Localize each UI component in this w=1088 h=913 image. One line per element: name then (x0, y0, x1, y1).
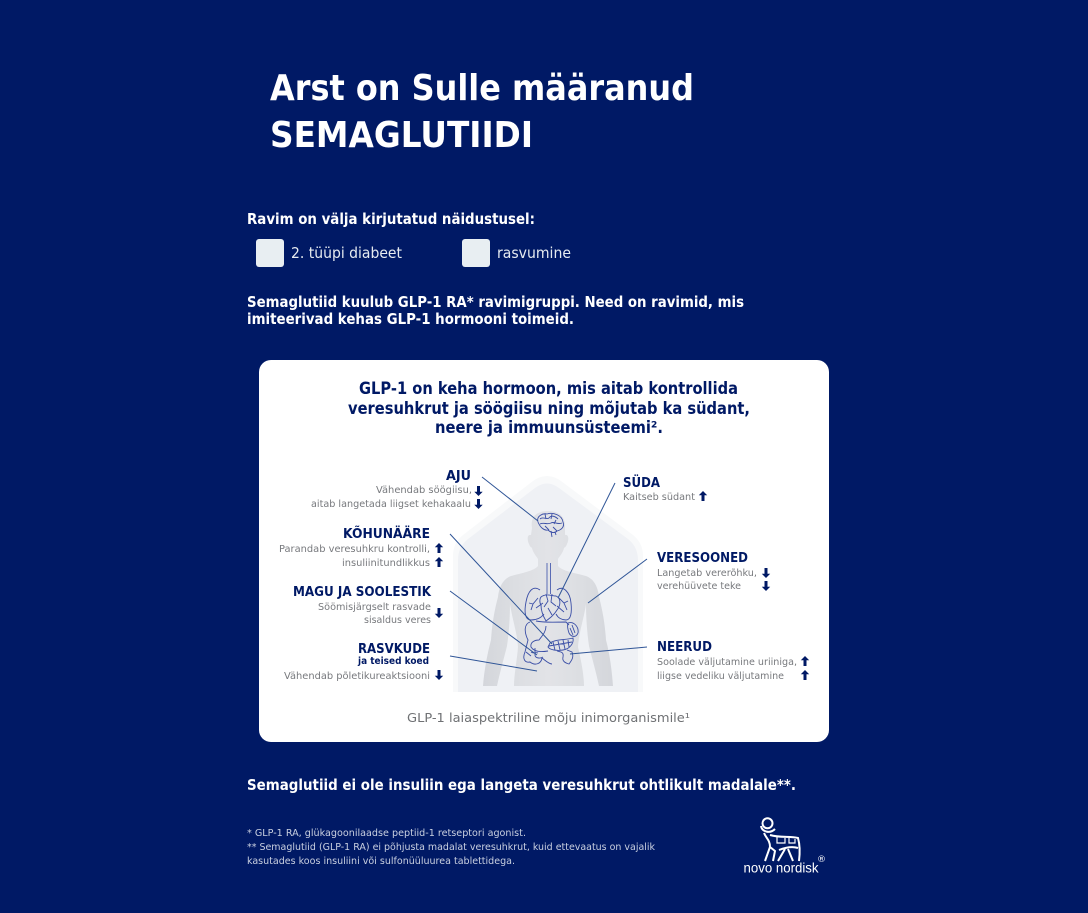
label: stomach and intestine: Söömisjärgselt rasvade (318, 602, 431, 613)
panel heading (348, 379, 750, 437)
panel caption: GLP-1 laiaspektriline mõju inimorganismile¹ (407, 710, 690, 725)
intro text (247, 293, 744, 328)
label: pancreas: Parandab veresuhkru kontrolli, (279, 544, 430, 555)
label: heart: SÜDA (623, 475, 660, 491)
title: SEMAGLUTIIDI (270, 115, 533, 156)
statement: Semaglutiid ei ole insuliin ega langeta veresuhkrut ohtlikult madalale**. (247, 776, 796, 794)
panel heading: GLP-1 on keha hormoon, mis aitab kontrollida (359, 379, 738, 398)
label: pancreas: insuliinitundlikkus (342, 558, 430, 569)
label: pancreas: KÕHUNÄÄRE (343, 526, 430, 542)
footnotes: kasutades koos insuliini või sulfonüüluurea tablettidega. (247, 856, 515, 867)
checkbox: type 2 diabetes (256, 239, 402, 267)
logo: novo nordisk (744, 818, 826, 876)
footnotes (247, 828, 655, 867)
label: kidneys: Soolade väljutamine uriiniga, (657, 657, 797, 668)
indication heading: Ravim on välja kirjutatud näidustusel: (247, 210, 535, 228)
label: adipose tissue: Vähendab põletikureaktsiooni (284, 671, 430, 682)
panel: GLP-1 effects (259, 360, 829, 742)
label: adipose tissue: RASVKUDE (358, 642, 430, 657)
intro text: Semaglutiid kuulub GLP-1 RA* ravimigruppi. Need on ravimid, mis (247, 293, 744, 311)
illustration: brain (538, 513, 564, 537)
title: Arst on Sulle määranud (270, 68, 694, 109)
label: heart: Kaitseb südant (623, 492, 695, 503)
footnotes: * GLP-1 RA, glükagoonilaadse peptiid-1 retseptori agonist. (247, 828, 526, 839)
label: kidneys: NEERUD (657, 640, 712, 655)
label: pancreas (279, 526, 443, 569)
checkbox: obesity (462, 239, 571, 267)
leader lines (450, 477, 647, 671)
house backdrop (453, 476, 643, 692)
illustration: digestive organs (524, 621, 578, 664)
label: blood vessels (657, 551, 770, 592)
label: brain: aitab langetada liigset kehakaalu (311, 499, 471, 510)
illustration: heart (540, 594, 560, 621)
illustration: trachea and lungs (525, 563, 571, 620)
logo: novo nordisk: ® (817, 855, 826, 865)
label: stomach and intestine: sisaldus veres (364, 615, 431, 626)
label: heart (623, 475, 707, 503)
illustration: human body (483, 511, 613, 686)
label: kidneys (657, 640, 809, 682)
footnotes: ** Semaglutiid (GLP-1 RA) ei põhjusta madalat veresuhkrut, kuid ettevaatus on vajalik (247, 842, 655, 853)
label: kidneys: liigse vedeliku väljutamine (657, 671, 784, 682)
panel heading: neere ja immuunsüsteemi². (435, 418, 663, 437)
label: blood vessels: verehüüvete teke (657, 581, 741, 592)
label: brain: AJU (446, 469, 471, 484)
label: brain (311, 469, 483, 510)
label: brain: Vähendab söögiisu, (376, 485, 472, 496)
label: adipose tissue: ja teised koed (357, 656, 429, 667)
label: blood vessels: VERESOONED (657, 551, 748, 566)
label: stomach and intestine: MAGU JA SOOLESTIK (293, 585, 432, 600)
label: adipose tissue (284, 642, 443, 682)
logo: novo nordisk: novo nordisk (744, 860, 819, 876)
intro text: imiteerivad kehas GLP-1 hormooni toimeid. (247, 310, 574, 328)
title (270, 68, 694, 156)
panel heading: veresuhkrut ja söögiisu ning mõjutab ka südant, (348, 399, 750, 418)
checkbox: type 2 diabetes: 2. tüüpi diabeet (291, 244, 402, 262)
label: blood vessels: Langetab vererõhku, (657, 568, 757, 579)
label: stomach and intestine (293, 585, 443, 626)
checkbox: obesity: rasvumine (497, 244, 571, 262)
